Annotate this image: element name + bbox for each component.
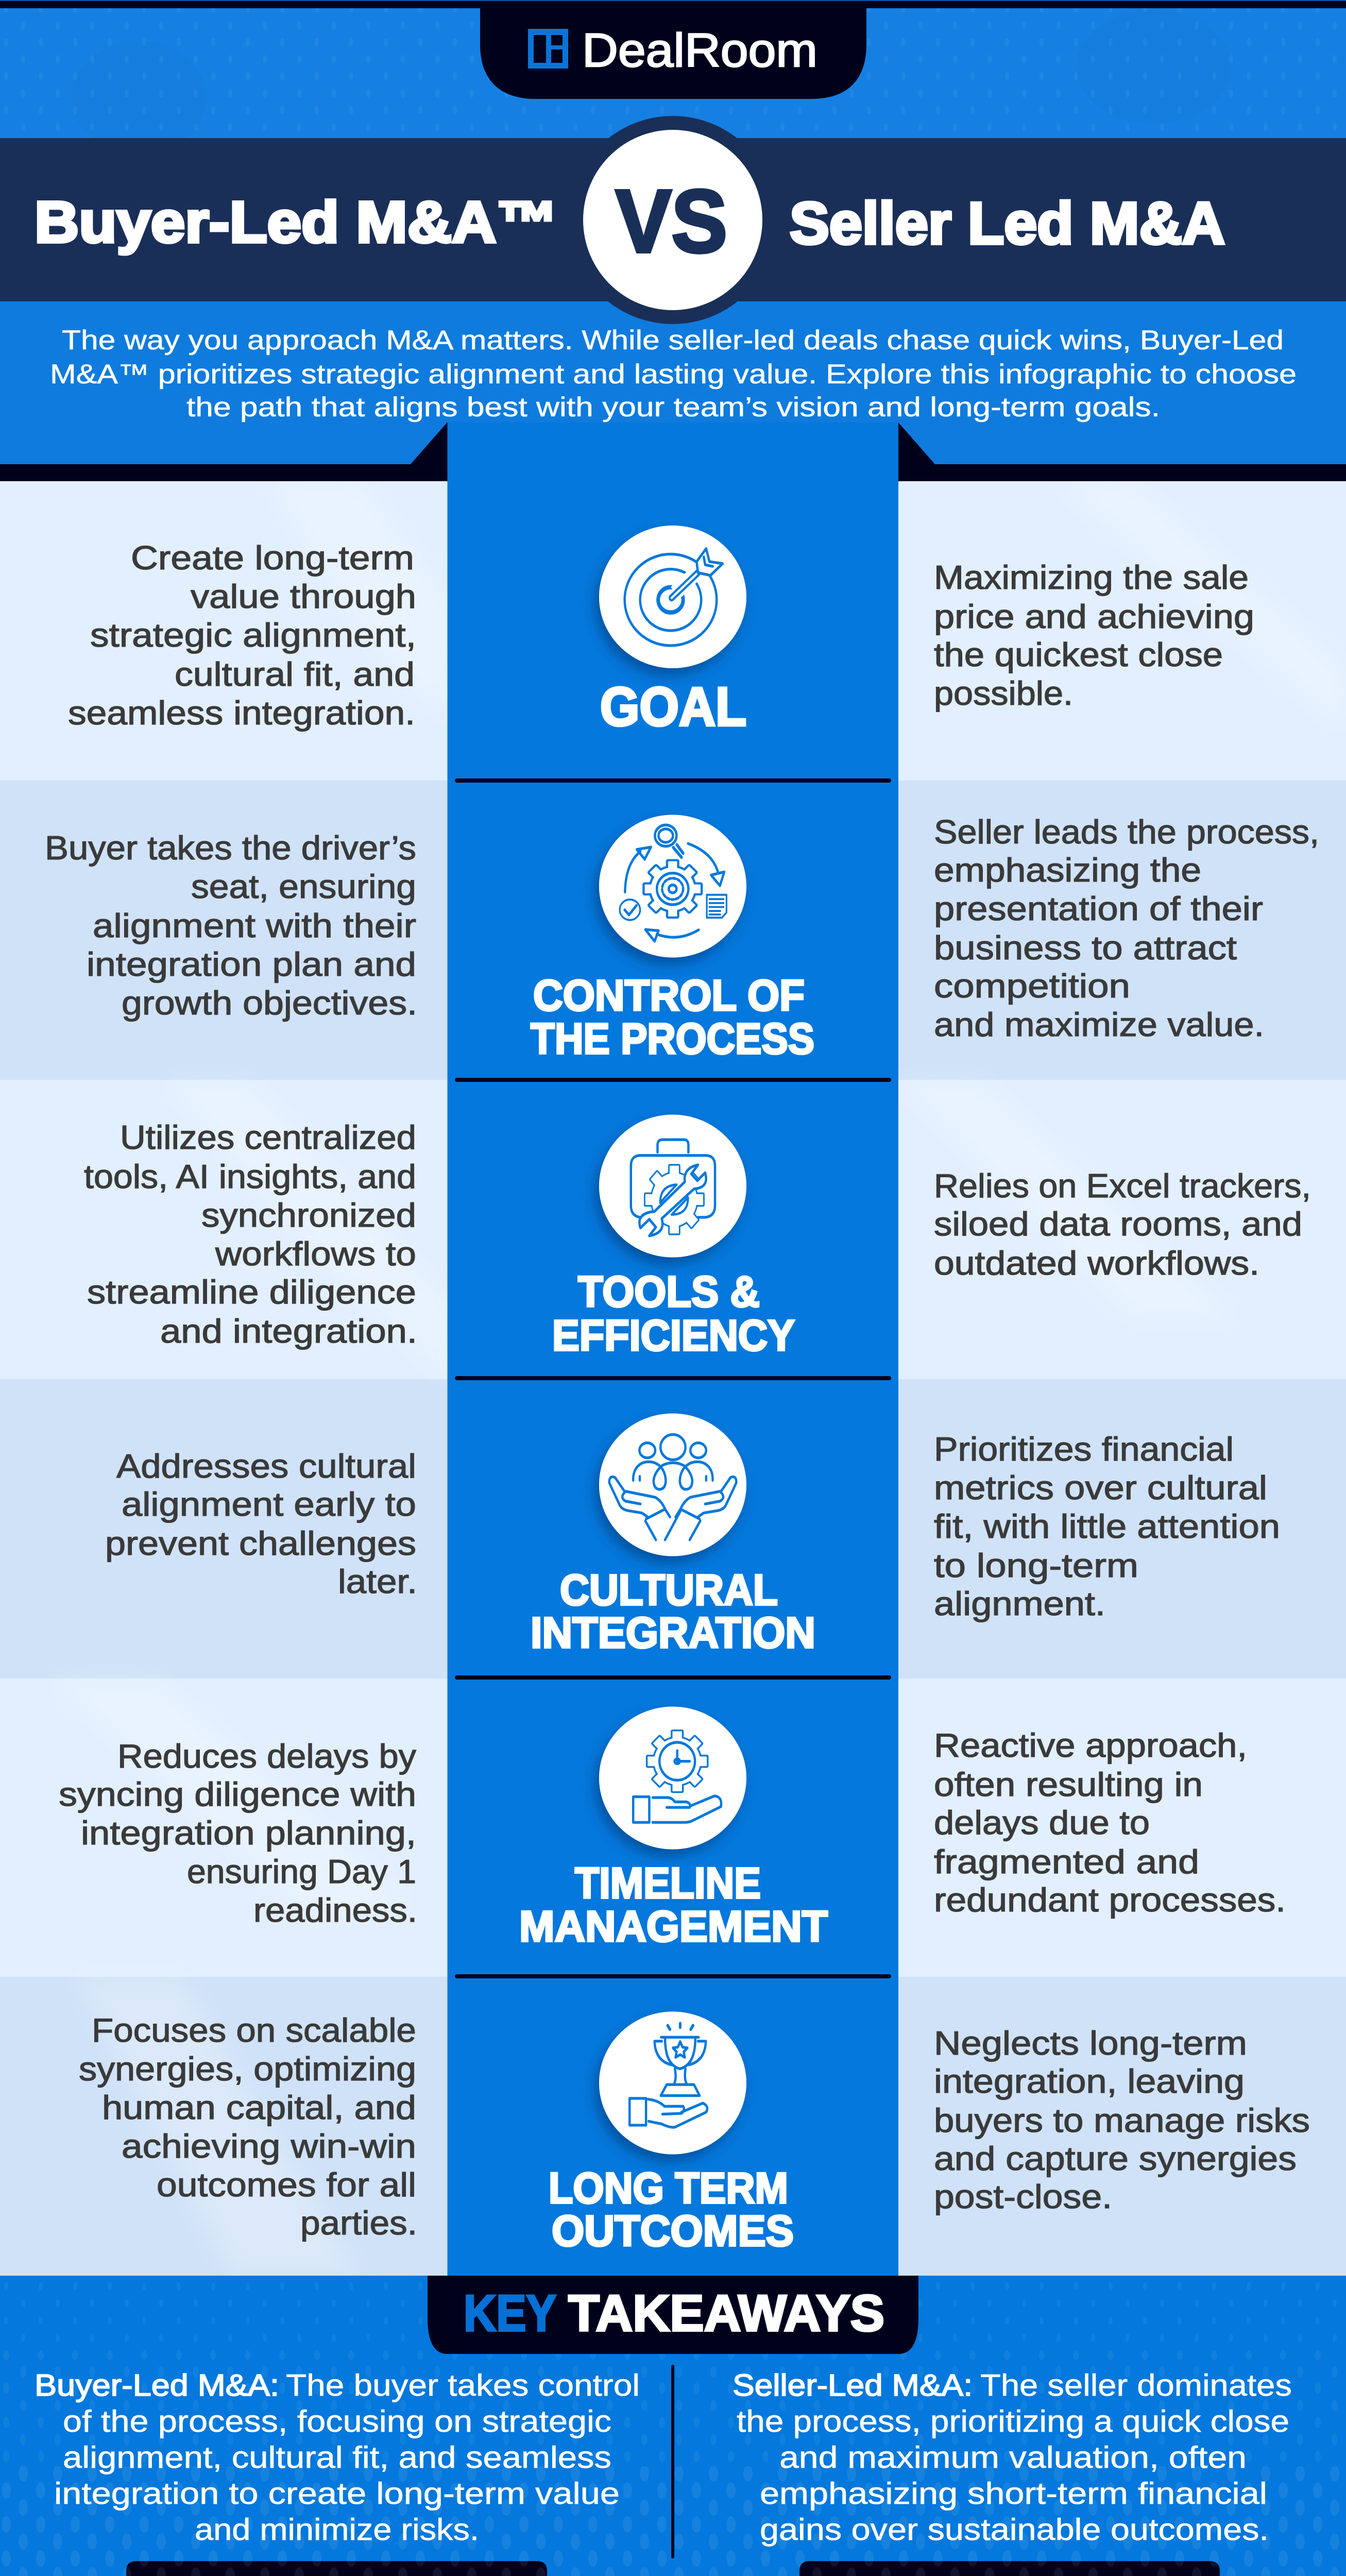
heading: tools and efficiency: TOOLS & bbox=[578, 1267, 760, 1316]
heading: long term outcomes bbox=[549, 2164, 794, 2255]
seller text: tools: siloed data rooms, and bbox=[934, 1205, 1302, 1243]
seller text: cultural: metrics over cultural bbox=[934, 1469, 1267, 1506]
heading: long term outcomes: OUTCOMES bbox=[552, 2207, 794, 2255]
seller text: goal bbox=[934, 558, 1254, 712]
heading: control of the process bbox=[531, 971, 814, 1063]
heading: cultural integration: CULTURAL bbox=[560, 1566, 778, 1614]
buyer text: goal: strategic alignment, bbox=[90, 616, 416, 654]
seller text: outcomes: Neglects long-term bbox=[934, 2024, 1247, 2062]
buyer text: outcomes: parties. bbox=[300, 2204, 417, 2242]
buyer-led takeaway: The buyer takes control bbox=[286, 2368, 640, 2402]
buyer text: control: growth objectives. bbox=[122, 984, 417, 1022]
seller text: goal: price and achieving bbox=[934, 598, 1254, 635]
row 3: tools and efficiency bbox=[84, 1115, 1311, 1360]
buyer text: tools: tools, AI insights, and bbox=[84, 1158, 416, 1195]
seller text: goal: Maximizing the sale bbox=[934, 558, 1249, 596]
icon: gear clock on hand bbox=[599, 1706, 746, 1850]
buyer text: control: seat, ensuring bbox=[191, 868, 416, 905]
intro text bbox=[50, 325, 1297, 422]
seller text: cultural: Prioritizes financial bbox=[934, 1430, 1234, 1468]
seller-led takeaway: the process, prioritizing a quick close bbox=[737, 2404, 1289, 2438]
buyer text: tools: and integration. bbox=[160, 1312, 417, 1350]
VS badge: VS bbox=[616, 171, 727, 271]
buyer text: timeline: readiness. bbox=[253, 1891, 417, 1929]
intro text: The way you approach M&A matters. While seller-led deals chase quick wins, Buyer-Led bbox=[62, 325, 1284, 355]
row 4: cultural integration bbox=[105, 1414, 1280, 1657]
buyer-led takeaway: of the process, focusing on strategic bbox=[63, 2404, 611, 2438]
seller-led takeaway: gains over sustainable outcomes. bbox=[760, 2513, 1269, 2547]
seller text: cultural: to long-term bbox=[934, 1547, 1138, 1584]
heading: tools and efficiency bbox=[552, 1267, 795, 1360]
seller text: control: Seller leads the process, bbox=[934, 813, 1319, 851]
key takeaways heading tab bbox=[428, 2276, 918, 2354]
buyer text: tools bbox=[84, 1118, 417, 1350]
center divider bbox=[671, 2365, 674, 2558]
buyer text: tools: Utilizes centralized bbox=[120, 1118, 416, 1156]
buyer text: goal: value through bbox=[191, 578, 416, 615]
buyer text: outcomes bbox=[79, 2011, 417, 2242]
buyer text: goal bbox=[68, 539, 416, 732]
buyer-led takeaway: integration to create long-term value bbox=[54, 2477, 620, 2511]
heading: control of the process: THE PROCESS bbox=[531, 1014, 814, 1063]
seller text: cultural: fit, with little attention bbox=[934, 1507, 1280, 1545]
buyer text: cultural: alignment early to bbox=[122, 1485, 416, 1523]
key takeaways panel bbox=[0, 2276, 1346, 2576]
footer pill: left bbox=[126, 2561, 547, 2576]
logo tab bbox=[480, 5, 866, 99]
buyer text: timeline: integration planning, bbox=[81, 1814, 416, 1852]
buyer text: cultural: later. bbox=[338, 1563, 417, 1600]
seller-led takeaway: and maximum valuation, often bbox=[779, 2441, 1247, 2475]
seller-led takeaway: emphasizing short-term financial bbox=[760, 2477, 1267, 2511]
buyer text: tools: streamline diligence bbox=[87, 1273, 416, 1311]
heading: timeline management bbox=[519, 1859, 828, 1951]
row 6: long term outcomes bbox=[79, 2011, 1310, 2255]
heading: long term outcomes: LONG TERM bbox=[549, 2164, 788, 2212]
buyer text: timeline: Reduces delays by bbox=[117, 1737, 417, 1775]
buyer text: outcomes: human capital, and bbox=[102, 2089, 416, 2126]
seller text: timeline: fragmented and bbox=[934, 1843, 1199, 1880]
seller text: control: business to attract bbox=[934, 929, 1237, 967]
logo wordmark: DealRoom bbox=[582, 24, 817, 77]
buyer-led takeaway: Buyer-Led M&A: bbox=[35, 2368, 279, 2402]
seller text: timeline: often resulting in bbox=[934, 1766, 1203, 1803]
heading: control of the process: CONTROL OF bbox=[533, 971, 805, 1020]
buyer text: control: integration plan and bbox=[87, 945, 416, 983]
seller text: control: and maximize value. bbox=[934, 1006, 1264, 1043]
heading: tools and efficiency: EFFICIENCY bbox=[552, 1311, 795, 1360]
seller text: tools bbox=[934, 1167, 1311, 1282]
buyer text: control: Buyer takes the driver’s bbox=[45, 829, 416, 867]
dark header bar with shoulders bbox=[0, 422, 1346, 481]
buyer text: goal: seamless integration. bbox=[68, 694, 415, 732]
buyer text: cultural: prevent challenges bbox=[105, 1524, 416, 1562]
buyer-led takeaway: and minimize risks. bbox=[195, 2513, 479, 2547]
comparison rows background bbox=[0, 481, 1346, 2276]
icon: toolbox bbox=[599, 1115, 746, 1257]
buyer text: outcomes: Focuses on scalable bbox=[92, 2011, 416, 2049]
buyer text: goal: Create long-term bbox=[131, 539, 414, 577]
buyer text: cultural: Addresses cultural bbox=[116, 1447, 416, 1485]
buyer text: tools: synchronized bbox=[201, 1196, 416, 1234]
title: Seller Led: Seller Led M&A bbox=[790, 191, 1225, 257]
key takeaways heading tab: KEY bbox=[464, 2284, 556, 2342]
center column bbox=[447, 422, 898, 2276]
icon: DealRoom logo mark bbox=[528, 29, 568, 69]
seller text: timeline: delays due to bbox=[934, 1804, 1150, 1841]
buyer text: goal: cultural fit, and bbox=[175, 655, 415, 693]
title band bbox=[0, 138, 1346, 301]
row 1: goal bbox=[68, 526, 1254, 737]
buyer text: outcomes: synergies, optimizing bbox=[79, 2050, 416, 2088]
intro text: the path that aligns best with your team’s vision and long-term goals. bbox=[186, 392, 1160, 422]
footer pill: right bbox=[799, 2561, 1220, 2576]
seller-led takeaway: Seller-Led M&A: bbox=[732, 2368, 973, 2402]
buyer text: timeline bbox=[59, 1737, 417, 1929]
seller text: outcomes: and capture synergies bbox=[934, 2140, 1297, 2177]
icon: target bbox=[599, 526, 746, 668]
buyer text: timeline: ensuring Day 1 bbox=[187, 1853, 416, 1890]
seller text: outcomes: buyers to manage risks bbox=[934, 2102, 1310, 2139]
seller text: tools: Relies on Excel trackers, bbox=[934, 1167, 1311, 1205]
seller text: tools: outdated workflows. bbox=[934, 1244, 1259, 1282]
heading: cultural integration: INTEGRATION bbox=[531, 1608, 815, 1657]
seller text: control: presentation of their bbox=[934, 890, 1263, 927]
buyer text: tools: workflows to bbox=[215, 1235, 416, 1273]
buyer text: control bbox=[45, 829, 417, 1022]
buyer text: outcomes: outcomes for all bbox=[157, 2166, 416, 2204]
seller text: timeline: redundant processes. bbox=[934, 1881, 1286, 1919]
seller text: cultural: alignment. bbox=[934, 1585, 1105, 1622]
buyer text: timeline: syncing diligence with bbox=[59, 1775, 416, 1813]
row 2: control of the process bbox=[45, 813, 1319, 1063]
buyer text: outcomes: achieving win-win bbox=[122, 2127, 416, 2165]
VS badge bbox=[569, 116, 777, 324]
heading: timeline management: MANAGEMENT bbox=[519, 1902, 828, 1951]
seller text: goal: possible. bbox=[934, 674, 1073, 712]
intro text: M&A™ prioritizes strategic alignment and lasting value. Explore this infographic to choose bbox=[50, 359, 1297, 389]
seller-led takeaway bbox=[732, 2368, 1292, 2547]
buyer text: control: alignment with their bbox=[93, 907, 416, 944]
seller text: control bbox=[934, 813, 1319, 1043]
buyer text: cultural bbox=[105, 1447, 417, 1600]
header background bbox=[0, 0, 1346, 465]
buyer-led takeaway: alignment, cultural fit, and seamless bbox=[63, 2441, 611, 2475]
seller text: goal: the quickest close bbox=[934, 636, 1223, 673]
seller text: control: competition bbox=[934, 967, 1130, 1005]
buyer-led takeaway bbox=[35, 2368, 640, 2547]
seller text: timeline bbox=[934, 1726, 1286, 1919]
key takeaways heading tab: TAKEAWAYS bbox=[568, 2284, 884, 2342]
seller text: cultural bbox=[934, 1430, 1280, 1622]
seller text: outcomes: post-close. bbox=[934, 2178, 1112, 2215]
seller text: control: emphasizing the bbox=[934, 851, 1201, 889]
seller text: timeline: Reactive approach, bbox=[934, 1726, 1247, 1764]
heading: goal: GOAL bbox=[600, 676, 746, 737]
seller-led takeaway: The seller dominates bbox=[980, 2368, 1292, 2402]
heading: timeline management: TIMELINE bbox=[575, 1859, 761, 1907]
row 5: timeline management bbox=[59, 1706, 1286, 1951]
icon: trophy on hand bbox=[599, 2011, 746, 2155]
title: Buyer-Led: Buyer-Led M&A™ bbox=[35, 190, 558, 255]
icon: process cycle bbox=[599, 815, 746, 957]
heading: cultural integration bbox=[531, 1566, 815, 1657]
seller text: outcomes bbox=[934, 2024, 1310, 2215]
seller text: outcomes: integration, leaving bbox=[934, 2062, 1245, 2100]
icon: people in hands bbox=[599, 1414, 746, 1556]
